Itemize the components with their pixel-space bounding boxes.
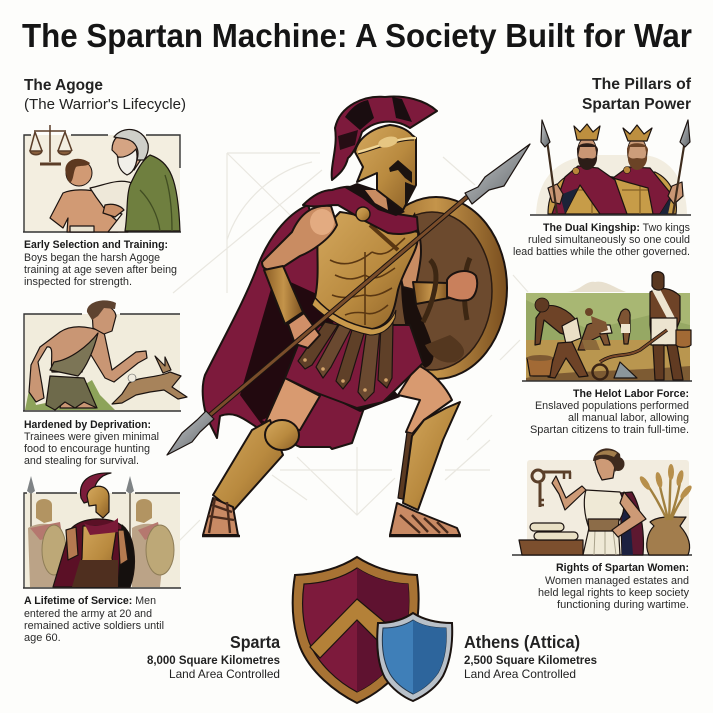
athens shield (377, 613, 452, 701)
caption: early selection and training (24, 239, 177, 288)
caption: the dual kingship: ruled simultaneously so one could (528, 234, 690, 246)
panel: the pillars of spartan power (512, 76, 693, 611)
athens label: Athens (Attica) (464, 632, 580, 652)
caption: hardened by deprivation (24, 419, 159, 467)
caption: early selection and training: inspected for strength. (24, 276, 132, 288)
caption: the dual kingship (513, 222, 690, 258)
caption: a lifetime of service: age 60. (24, 632, 61, 644)
caption: rights of spartan women: Women managed estates and (545, 575, 689, 587)
warrior shield (365, 197, 507, 379)
sparta shield (293, 557, 419, 703)
athens label: Land Area Controlled (464, 667, 576, 681)
warrior cape (203, 205, 364, 449)
warrior scarf and brooch (303, 187, 418, 234)
illustration: helots working the field (522, 272, 692, 381)
central spartan warrior illustration (167, 97, 530, 536)
caption: rights of spartan women: functioning during wartime. (557, 599, 689, 611)
heading: the pillars of spartan power (582, 76, 692, 113)
panel: the agoge lifecycle (23, 77, 187, 644)
illustration: spartan woman with key and wheat (512, 448, 693, 555)
caption: a lifetime of service: remained active soldiers until (24, 620, 164, 632)
sparta label: Sparta (230, 632, 280, 652)
heading: the agoge (24, 77, 186, 113)
caption: hardened by deprivation: food to encourage hunting (24, 443, 150, 455)
warrior right arm and hand (401, 230, 477, 322)
athens label: 2,500 Square Kilometres (464, 653, 597, 667)
background geometric construction lines (173, 153, 528, 545)
caption: the helot labor force: Enslaved populations performed (535, 400, 689, 412)
caption: the helot labor force (530, 388, 689, 436)
caption: hardened by deprivation: and stealing for survival. (24, 455, 139, 467)
heading: the agoge: The Agoge (24, 77, 103, 94)
warrior left arm with bracer (262, 206, 337, 348)
warrior cuirass torso (312, 212, 418, 335)
caption: the dual kingship: The Dual Kingship: Two kings (543, 222, 690, 234)
illustration: spartan soldier with hoplites (23, 473, 181, 588)
warrior spear (167, 144, 530, 455)
sparta label (147, 632, 280, 681)
heading: the pillars of spartan power: Spartan Power (582, 96, 691, 113)
caption: early selection and training: training at age seven after being (24, 264, 177, 276)
warrior crest plume (332, 97, 437, 180)
caption: rights of spartan women: Rights of Spartan Women: (556, 562, 689, 574)
sparta label: 8,000 Square Kilometres (147, 653, 280, 667)
title: The Spartan Machine: A Society Built for War (22, 17, 692, 54)
caption: a lifetime of service: entered the army at 20 and (24, 608, 152, 620)
warrior neck and hair (345, 183, 405, 216)
caption: rights of spartan women (538, 562, 689, 611)
illustration: two kings with spears (530, 120, 691, 215)
heading: the agoge: (The Warrior's Lifecycle) (24, 96, 186, 113)
heading: the pillars of spartan power: The Pillars of (592, 76, 692, 93)
caption: hardened by deprivation: Hardened by Deprivation: (24, 419, 151, 431)
caption: a lifetime of service: A Lifetime of Service: Men (24, 595, 156, 607)
athens label (464, 632, 597, 681)
illustration: boy inspected by elder (23, 125, 181, 232)
illustration: starving boy hunting rabbit (23, 300, 187, 411)
caption: rights of spartan women: held legal rights to keep society (538, 587, 689, 599)
caption: the dual kingship: lead batties while the other governed. (513, 246, 690, 258)
caption: the helot labor force: all manual labor, allowing (568, 412, 689, 424)
warrior corinthian helmet (355, 125, 416, 210)
caption: the helot labor force: The Helot Labor Force: (573, 388, 689, 400)
land area comparison (147, 557, 597, 703)
caption: a lifetime of service (24, 595, 164, 644)
caption: hardened by deprivation: Trainees were given minimal (24, 431, 159, 443)
warrior legs (202, 365, 461, 536)
sparta label: Land Area Controlled (169, 667, 280, 681)
caption: early selection and training: Early Selection and Training: (24, 239, 168, 251)
caption: early selection and training: Boys began the harsh Agoge (24, 252, 160, 264)
warrior skirt and pteruges (285, 322, 423, 408)
caption: the helot labor force: Spartan citizens to train full-time. (530, 424, 689, 436)
